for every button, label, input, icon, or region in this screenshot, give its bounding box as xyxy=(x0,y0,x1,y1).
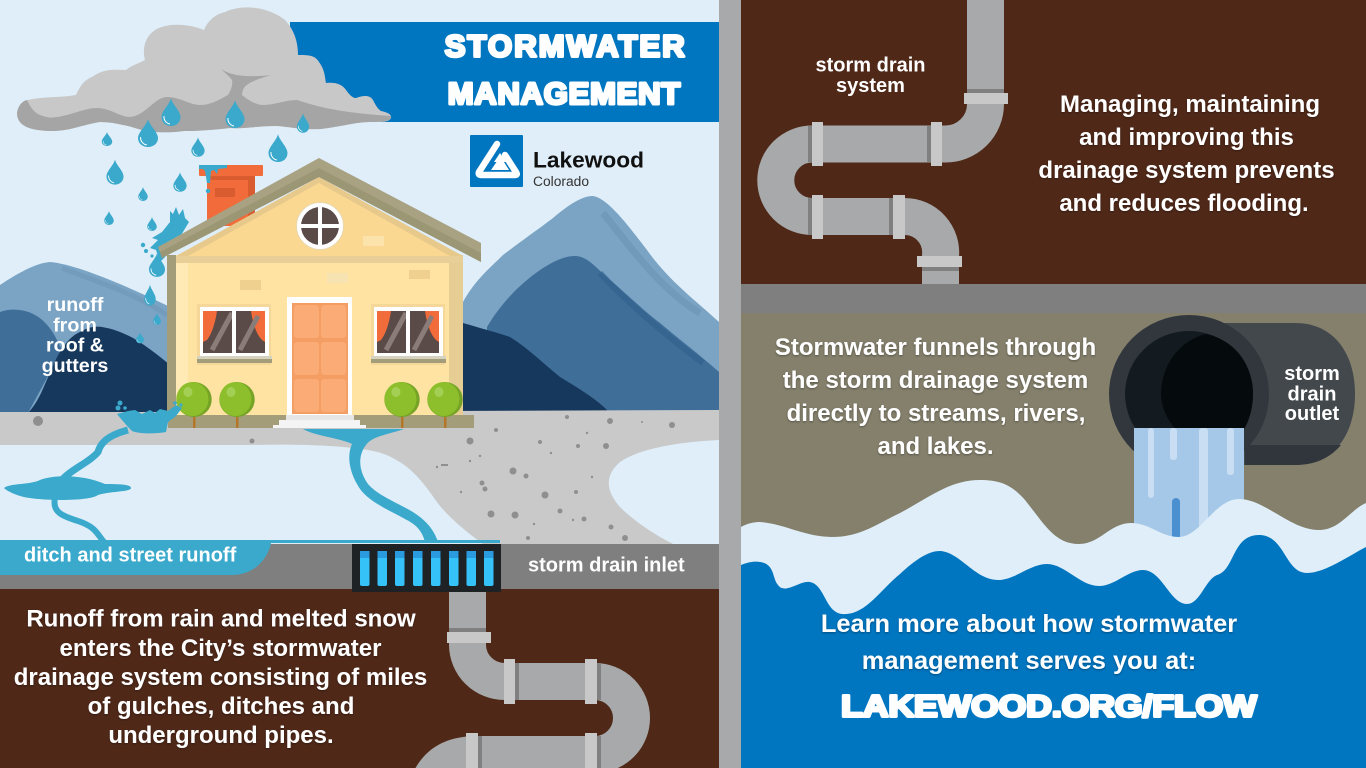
gravel dots xyxy=(33,415,675,541)
front stream xyxy=(303,429,438,542)
text: learn more: management serves you at: xyxy=(862,647,1196,675)
title text: MANAGEMENT xyxy=(448,76,680,111)
logo: Lakewood Colorado: Colorado xyxy=(533,174,589,189)
label: storm drain inlet: storm drain inlet xyxy=(528,554,685,576)
label: runoff from roof and gutters: roof & xyxy=(46,334,104,356)
mountains: right range xyxy=(463,196,719,413)
icon: roof splash xyxy=(141,207,189,262)
text: runoff description: Runoff from rain and melted snow xyxy=(26,606,416,632)
label: storm drain system: storm drain xyxy=(815,54,926,76)
text: funnels description: Stormwater funnels through xyxy=(775,334,1096,361)
steps xyxy=(273,415,366,428)
waterfall xyxy=(1134,428,1244,543)
road band xyxy=(741,284,1366,313)
ditch xyxy=(0,540,500,575)
text: website: LAKEWOOD.ORG/FLOW xyxy=(841,688,1258,723)
divider xyxy=(719,0,741,768)
bricks xyxy=(240,270,430,290)
icon: rain drops xyxy=(102,98,309,343)
round window xyxy=(296,202,344,250)
panel: drainage system xyxy=(741,0,1366,284)
roof xyxy=(158,158,481,262)
puddle xyxy=(4,476,131,500)
ground xyxy=(0,410,719,545)
door xyxy=(287,297,352,415)
text: managing description: and improving this xyxy=(1079,124,1294,151)
icon: storm cloud xyxy=(17,7,391,132)
text: managing description: and reduces flooding. xyxy=(1059,190,1309,217)
storm drain outlet label: storm xyxy=(1284,363,1340,385)
stream to ditch xyxy=(54,498,104,542)
logo: Lakewood Colorado: Lakewood xyxy=(533,148,644,173)
icon: storm drain outlet pipe xyxy=(1109,315,1355,473)
downspout splash xyxy=(117,405,182,433)
label: storm drain system: system xyxy=(836,75,905,97)
text: runoff description: of gulches, ditches and xyxy=(88,693,354,720)
label: runoff from roof and gutters: from xyxy=(53,314,97,336)
title banner xyxy=(290,22,719,122)
pipe: storm drain system xyxy=(776,0,1008,284)
label: ditch and street runoff: ditch and street runoff xyxy=(24,544,237,566)
title text: STORMWATER xyxy=(445,29,685,64)
storm drain inlet grate xyxy=(352,544,501,592)
panel: underground left xyxy=(0,544,719,768)
logo: Lakewood Colorado xyxy=(470,135,644,189)
lawn right xyxy=(609,440,719,545)
lawn left xyxy=(0,445,484,545)
right window xyxy=(371,304,446,365)
text: managing description: drainage system prevents xyxy=(1038,157,1335,184)
panel: house scene xyxy=(0,0,719,545)
road xyxy=(0,544,719,590)
stream to puddle xyxy=(62,430,128,480)
gable xyxy=(176,177,463,263)
panel: call to action xyxy=(741,535,1366,768)
text: runoff description: underground pipes. xyxy=(108,722,334,749)
title text xyxy=(445,29,685,111)
text: runoff description: enters the City’s stormwater xyxy=(60,635,381,662)
panel: outlet xyxy=(741,313,1366,573)
mountains: left range xyxy=(0,262,170,413)
text: funnels description: directly to streams, rivers, xyxy=(787,400,1085,427)
text: funnels description: and lakes. xyxy=(877,433,994,460)
bushes xyxy=(176,382,463,428)
left window xyxy=(197,304,272,365)
text: learn more: Learn more about how stormwater xyxy=(821,610,1237,638)
label: runoff from roof and gutters: runoff xyxy=(47,294,103,316)
waves: light water xyxy=(741,480,1366,620)
storm drain outlet label: outlet xyxy=(1285,403,1340,425)
text: managing description: Managing, maintaining xyxy=(1060,91,1320,118)
runoff streams xyxy=(0,400,500,575)
text: runoff description: drainage system consisting of miles xyxy=(14,664,427,691)
planter base xyxy=(168,415,286,428)
wall xyxy=(167,255,463,415)
icon: chimney xyxy=(199,165,263,226)
pipe: left drain pipe xyxy=(426,592,632,768)
storm drain outlet label: drain xyxy=(1288,384,1336,406)
house xyxy=(158,158,481,428)
text: funnels description: the storm drainage system xyxy=(783,367,1088,394)
label: runoff from roof and gutters: gutters xyxy=(42,355,108,377)
